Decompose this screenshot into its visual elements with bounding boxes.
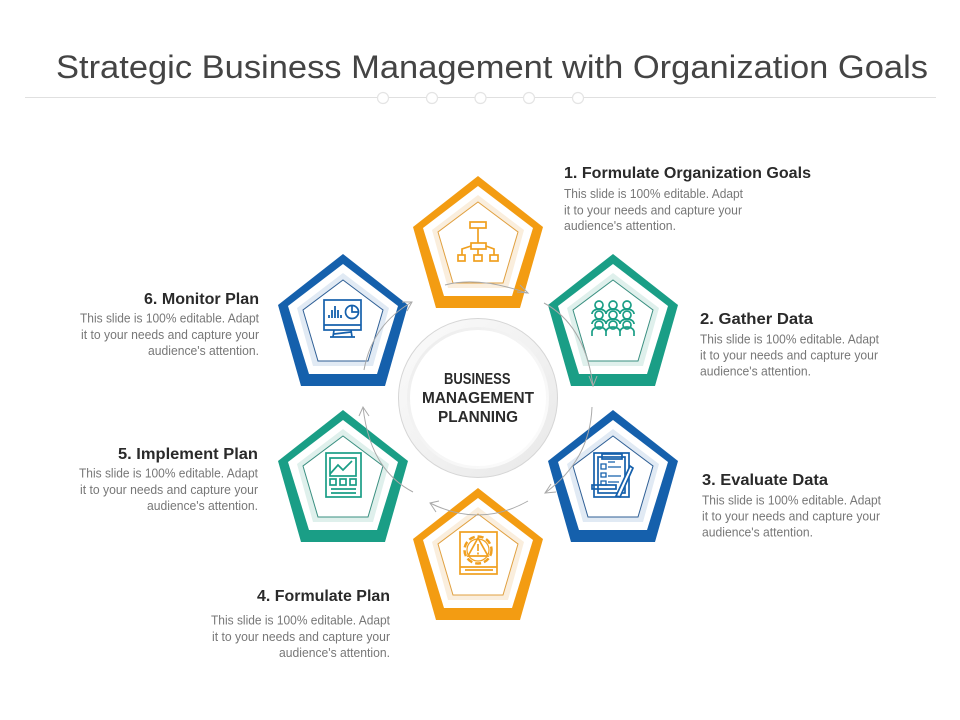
icon: group of people [592,301,634,336]
icon: org chart [458,222,498,261]
pentagon 3: blue, clipboard [548,410,678,542]
arrow: 1 to 2 [445,282,528,293]
step 4 text [211,588,391,660]
step 2 text: This slide is 100% editable. Adapt [700,332,879,346]
step 6 text: it to your needs and capture your [81,327,260,342]
step 5 text: audience's attention. [147,498,258,513]
step 5 text: it to your needs and capture your [80,482,259,497]
step 3 text: 3. Evaluate Data [702,472,828,489]
center circle: business management planning [398,318,558,478]
arrow: 4 to 5 [430,501,528,515]
step 6 text [80,291,260,358]
step 3 text: audience's attention. [702,524,813,540]
pentagon 2: teal, audience [548,254,678,386]
step 1 text [564,165,811,233]
step 1 text: This slide is 100% editable. Adapt [564,186,743,201]
step 5 text: 5. Implement Plan [118,446,258,463]
step 4 text: audience's attention. [279,645,390,660]
pentagon 5: teal, report chart [278,410,408,542]
step 2 text: audience's attention. [700,364,811,378]
center circle: business management planning: PLANNING [438,409,518,426]
icon: monitor with charts [324,300,361,337]
pentagon 1: orange, org chart [413,176,543,308]
icon: clipboard and pencil [592,453,633,497]
arrow: 5 to 6 [359,407,413,492]
title: Strategic Business Management with Organization Goals [56,49,928,85]
step 6 text: 6. Monitor Plan [144,291,259,308]
step 2 text: 2. Gather Data [700,311,813,328]
step 4 text: This slide is 100% editable. Adapt [211,612,390,628]
step 2 text [700,311,879,378]
center circle: business management planning: MANAGEMENT [422,390,535,407]
step 3 text: This slide is 100% editable. Adapt [702,492,881,508]
pentagon 6: blue, monitor [278,254,408,386]
step 2 text: it to your needs and capture your [700,348,879,362]
arrow: 3 to 4 [545,407,592,493]
pentagon 4: orange, gear book [413,488,543,620]
step 3 text [702,472,881,540]
step 6 text: audience's attention. [148,343,259,358]
icon: book with gear and warning [460,532,497,574]
title divider with dots [25,92,936,104]
center circle: business management planning: BUSINESS [444,371,510,388]
step 5 text: This slide is 100% editable. Adapt [79,466,258,480]
step 1 text: 1. Formulate Organization Goals [564,165,811,182]
icon: report with line chart [326,453,361,497]
step 1 text: audience's attention. [564,218,676,233]
step 4 text: it to your needs and capture your [212,629,391,644]
arrow: 6 to 1 [364,302,412,370]
arrow: 2 to 3 [544,303,597,386]
step 6 text: This slide is 100% editable. Adapt [80,310,259,326]
step 4 text: 4. Formulate Plan [257,588,390,605]
step 5 text [79,446,259,513]
step 1 text: it to your needs and capture your [564,202,743,218]
step 3 text: it to your needs and capture your [702,508,881,524]
